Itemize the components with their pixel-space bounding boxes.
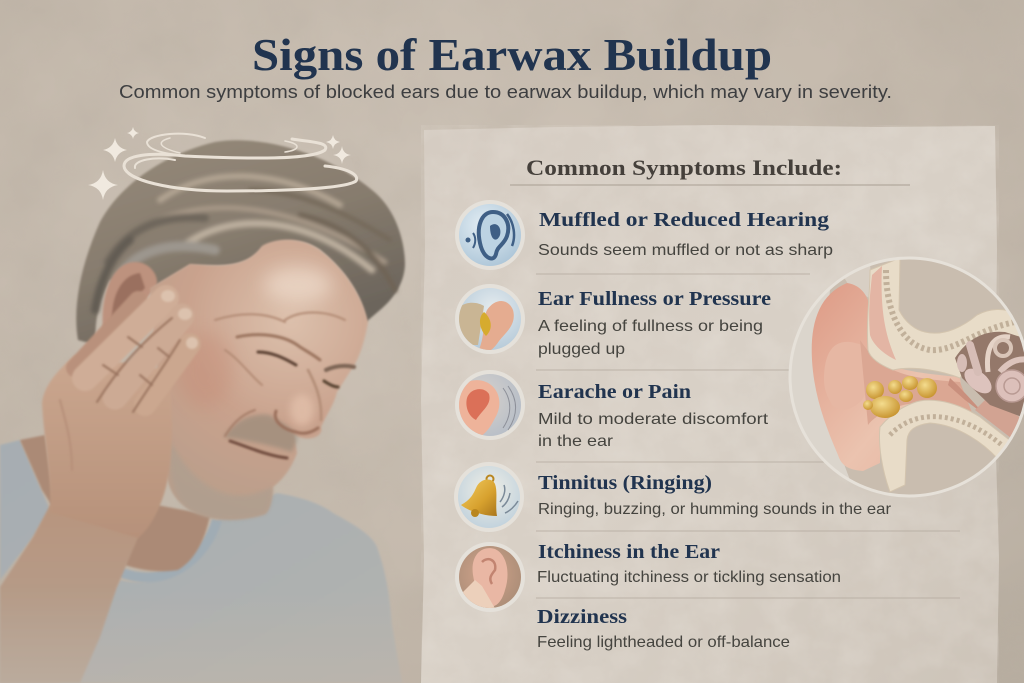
icon: finger touching ear: [455, 542, 525, 612]
symptom title: Ear Fullness or Pressure: [538, 289, 771, 310]
face: [150, 240, 368, 520]
concha: [824, 342, 856, 384]
cheek flush: [177, 332, 233, 408]
symptom: earache: [455, 370, 769, 450]
ear: [103, 262, 157, 330]
symptom: tinnitus: [454, 462, 892, 532]
stubble: [170, 440, 273, 520]
symptom title: Tinnitus (Ringing): [538, 473, 712, 494]
symptom title: Muffled or Reduced Hearing: [539, 210, 829, 231]
upper canal lining: [869, 266, 896, 360]
panel: common symptoms: [421, 125, 999, 683]
callout: ear canal cross-section with earwax: [789, 255, 1024, 500]
symptom text: plugged up: [538, 341, 625, 358]
shirt collar: [120, 520, 217, 577]
forearm: [0, 500, 150, 683]
outer ear: [812, 283, 965, 471]
eardrum: [948, 378, 978, 408]
dividers: [510, 185, 960, 598]
symptom: ear fullness: [455, 284, 771, 358]
symptom: dizziness: [537, 607, 790, 651]
lower bone: [879, 400, 1012, 492]
symptom text: A feeling of fullness or being: [538, 318, 763, 335]
earwax: [863, 376, 937, 418]
symptom text: Sounds seem muffled or not as sharp: [538, 242, 833, 259]
forehead highlight: [264, 267, 332, 303]
neck: [20, 435, 210, 571]
subtitle: Common symptoms of blocked ears due to earwax buildup, which may vary in severity.: [119, 81, 892, 102]
hair: [76, 140, 405, 345]
finger creases: [60, 318, 180, 470]
facial features: [215, 312, 354, 458]
fingers: [75, 298, 190, 405]
fingernails: [161, 290, 198, 349]
bottom fade: [0, 590, 420, 683]
illustration: man holding his ear: [0, 140, 420, 683]
hair streaks: [95, 176, 395, 310]
palm: [42, 355, 172, 538]
shirt: [0, 440, 402, 683]
upper bone: [867, 258, 1024, 378]
icon: ear with sound waves: [455, 200, 525, 270]
icon: ear with wax plug: [455, 284, 525, 354]
symptom text: Feeling lightheaded or off-balance: [537, 634, 790, 651]
symptom title: Itchiness in the Ear: [538, 542, 720, 563]
ear inner shadow: [112, 273, 145, 318]
symptom title: Dizziness: [537, 607, 627, 628]
icon: ringing bell: [454, 462, 524, 532]
inner ear: [955, 332, 1024, 420]
paper sheet: [421, 125, 999, 683]
symptom: muffled hearing: [455, 200, 833, 270]
symptom text: Mild to moderate discomfort: [538, 411, 769, 428]
title: Signs of Earwax Buildup: [252, 29, 772, 80]
symptom text: in the ear: [538, 433, 614, 450]
moustache: [224, 414, 297, 452]
icon: inflamed ear: [455, 370, 525, 440]
panel heading: Common Symptoms Include:: [526, 155, 842, 180]
symptom title: Earache or Pain: [538, 382, 691, 403]
icon: dizzy swirl and sparkles: [88, 127, 357, 200]
symptom text: Ringing, buzzing, or humming sounds in the ear: [538, 501, 892, 518]
symptom: itchiness: [455, 542, 841, 612]
nose highlight: [290, 394, 314, 426]
interior background: [830, 260, 1020, 494]
symptom text: Fluctuating itchiness or tickling sensation: [537, 569, 841, 586]
